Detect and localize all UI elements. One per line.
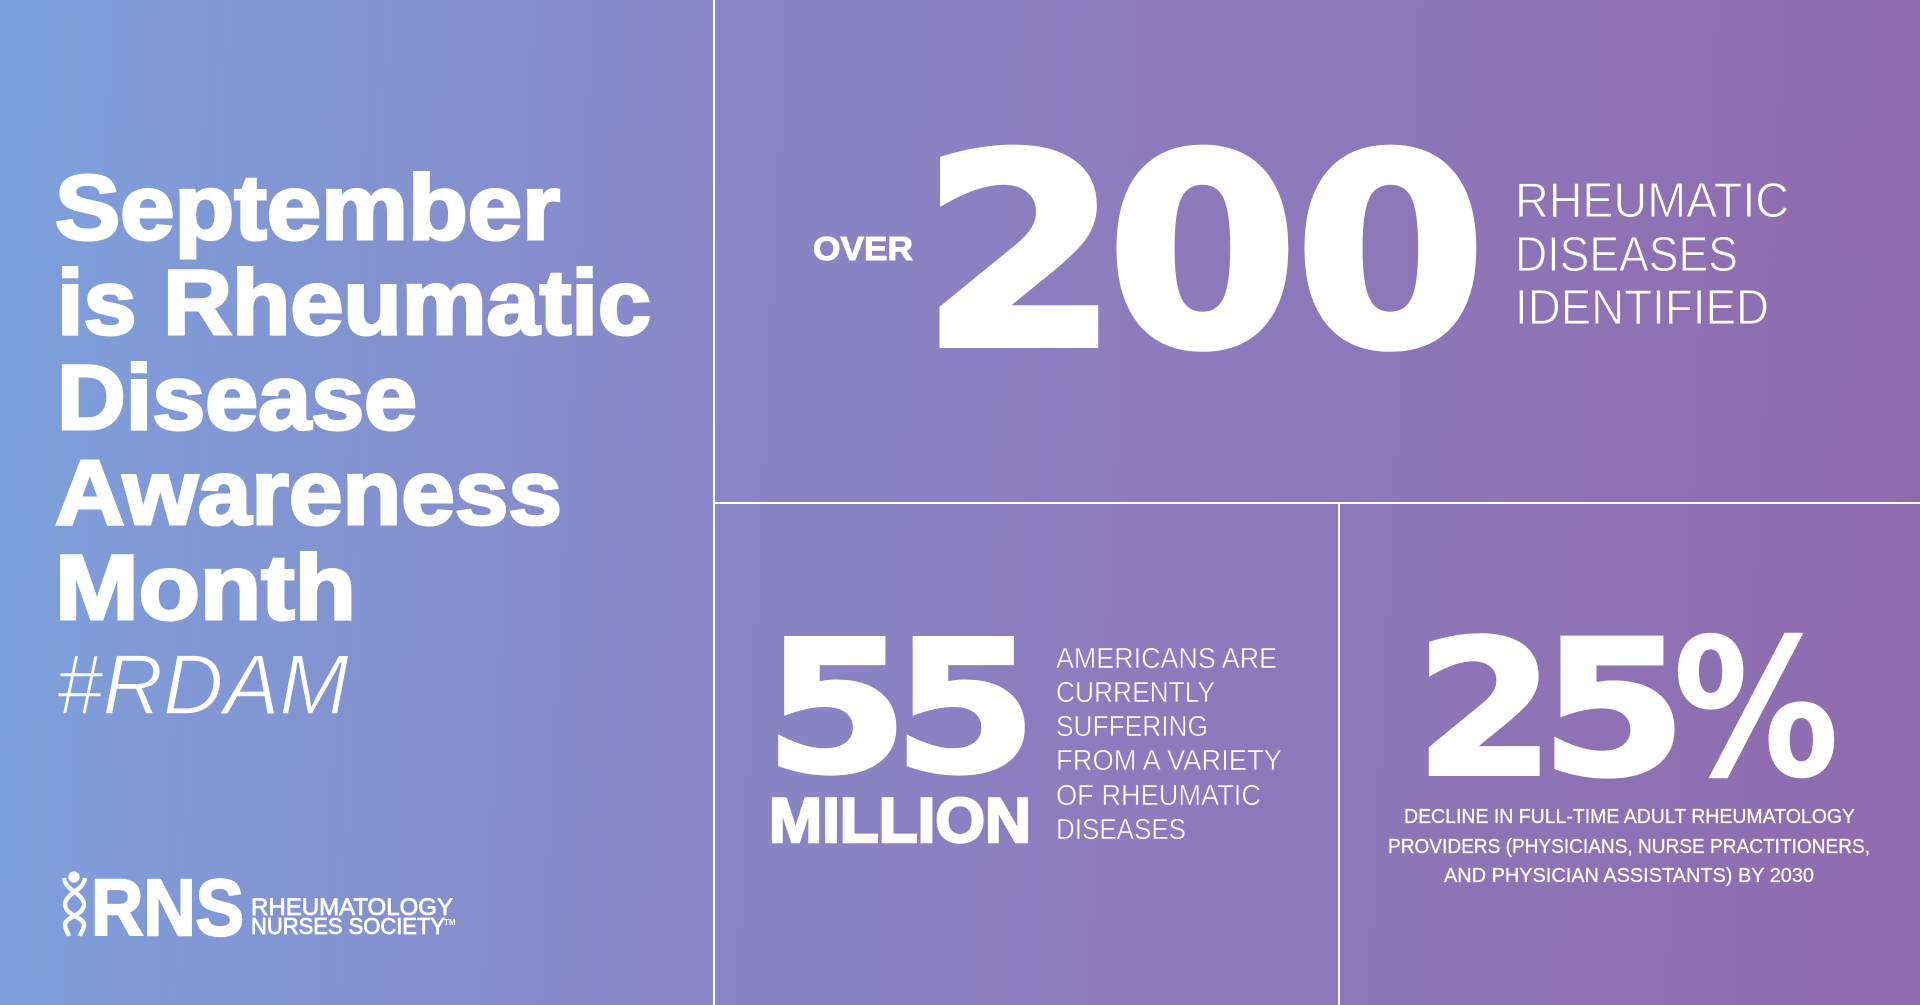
logo: Rheumatology Nurses Society: NURSES SOCIETY [251,913,445,939]
hashtag: #RDAM [56,638,349,733]
big number: 200: 2 [920,98,1120,408]
heading: September is Rheumatic Disease Awareness Month: Month [55,537,356,639]
description: americans suffering: DISEASES [1056,814,1186,846]
logo: Rheumatology Nurses Society: RNS [91,863,244,952]
icon: DNA helix figure [64,871,85,936]
big number: 25%: 5 [1540,601,1687,819]
big number: 25% [1415,599,1839,821]
description: americans suffering: AMERICANS ARE [1056,643,1277,675]
description: americans suffering: OF RHEUMATIC [1056,780,1261,812]
heading: September is Rheumatic Disease Awareness Month: Awareness [55,442,562,544]
description: americans suffering [1056,643,1282,846]
description: decline in providers: AND PHYSICIAN ASSISTANTS) BY 2030 [1444,865,1814,887]
description: americans suffering: SUFFERING [1056,711,1208,743]
big number: 55 [764,603,1037,815]
big number: 25%: % [1673,599,1839,821]
panel: 25 percent [1388,599,1870,887]
big number: 25%: 2 [1415,601,1555,819]
big number: 200: 0 [1294,98,1486,408]
logo: Rheumatology Nurses Society [64,863,456,952]
big number: 200: 0 [1106,98,1298,408]
description: rheumatic diseases identified: RHEUMATIC [1515,174,1789,228]
label: million: MILLION [769,786,1031,856]
big number: 55: 5 [764,603,908,815]
description: decline in providers: PROVIDERS (PHYSICIANS, NURSE PRACTITIONERS, [1388,836,1870,858]
description: rheumatic diseases identified: IDENTIFIED [1515,281,1769,335]
logo: Rheumatology Nurses Society: TM [444,918,456,927]
panel: 55 million [764,603,1282,856]
panel: title [55,157,651,733]
heading: September is Rheumatic Disease Awareness Month: is Rheumatic [57,252,651,354]
description: americans suffering: FROM A VARIETY [1056,745,1282,777]
heading: September is Rheumatic Disease Awareness Month: September [55,157,560,259]
logo: Rheumatology Nurses Society: RHEUMATOLOGY [251,894,453,921]
description: rheumatic diseases identified: DISEASES [1515,228,1738,282]
description: rheumatic diseases identified [1515,174,1789,335]
big number: 200 [920,98,1486,408]
heading: September is Rheumatic Disease Awareness Month: Disease [57,347,417,449]
description: americans suffering: CURRENTLY [1056,677,1215,709]
description: decline in providers: DECLINE IN FULL-TIME ADULT RHEUMATOLOGY [1404,806,1855,828]
label: over: OVER [813,230,913,267]
description: decline in providers [1388,806,1870,887]
heading: September is Rheumatic Disease Awareness Month [55,157,651,639]
big number: 55: 5 [893,603,1037,815]
panel: over 200 rheumatic diseases [813,98,1789,408]
